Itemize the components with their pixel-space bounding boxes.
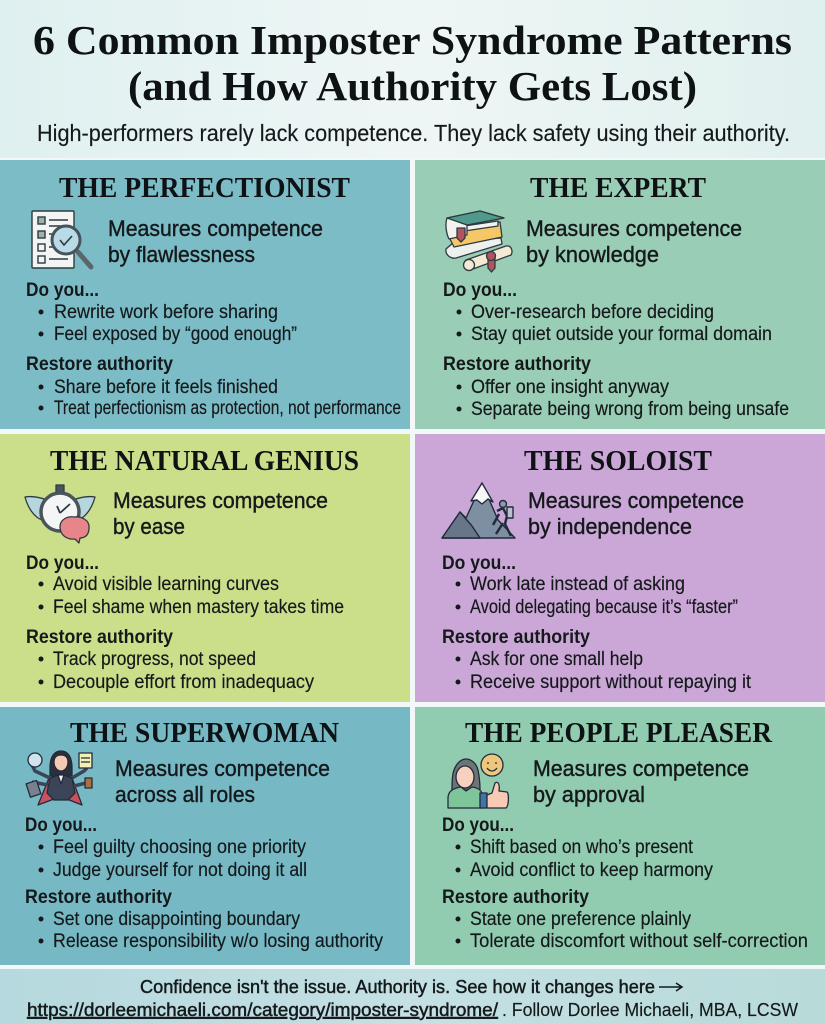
do you list: Shift based on who’s present bbox=[470, 837, 694, 858]
restore authority list: Treat perfectionism as protection, not performance bbox=[54, 398, 401, 419]
restore authority list: Tolerate discomfort without self-correction bbox=[470, 931, 808, 952]
do you list: Over-research before deciding bbox=[471, 302, 714, 323]
icon: superwoman multitasking bbox=[26, 751, 92, 805]
panel: the soloist bbox=[415, 434, 825, 702]
do you list: Feel shame when mastery takes time bbox=[53, 597, 344, 618]
heading: THE PERFECTIONIST bbox=[59, 173, 350, 204]
panel: the perfectionist bbox=[0, 160, 410, 429]
title: (and How Authority Gets Lost) bbox=[128, 63, 697, 109]
restore authority list: Restore authority bbox=[25, 886, 172, 908]
restore authority list: Separate being wrong from being unsafe bbox=[471, 399, 789, 420]
restore authority list: Receive support without repaying it bbox=[470, 672, 752, 693]
do you list bbox=[443, 279, 772, 345]
measure statement: Measures competence bbox=[533, 756, 749, 781]
icon: mountain with climber bbox=[442, 483, 515, 538]
restore authority list: Release responsibility w/o losing authority bbox=[53, 931, 383, 952]
link and follow line: https://dorleemichaeli.com/category/imposter-syndrome/ bbox=[27, 1000, 498, 1020]
measure statement: by knowledge bbox=[526, 242, 659, 267]
measure statement: Measures competence bbox=[528, 488, 744, 513]
measure statement bbox=[533, 756, 749, 807]
do you list bbox=[25, 814, 307, 881]
measure statement bbox=[108, 216, 323, 267]
restore authority list bbox=[26, 626, 314, 693]
do you list: Judge yourself for not doing it all bbox=[53, 860, 307, 881]
subtitle: High-performers rarely lack competence. They lack safety using their authority. bbox=[37, 120, 790, 146]
restore authority list: Set one disappointing boundary bbox=[53, 909, 300, 930]
restore authority list: Restore authority bbox=[442, 626, 590, 648]
do you list: Do you... bbox=[442, 552, 516, 574]
icon: checklist with magnifier bbox=[32, 211, 91, 268]
measure statement: Measures competence bbox=[108, 216, 323, 241]
restore authority list bbox=[442, 886, 808, 952]
icon: winged stopwatch and brain bbox=[25, 485, 95, 543]
restore authority list: Restore authority bbox=[442, 886, 589, 908]
restore authority list: Offer one insight anyway bbox=[471, 377, 669, 398]
do you list: Do you... bbox=[443, 279, 517, 301]
restore authority list bbox=[26, 353, 401, 419]
do you list bbox=[26, 279, 297, 345]
do you list: Rewrite work before sharing bbox=[54, 302, 278, 323]
restore authority list: Track progress, not speed bbox=[53, 649, 256, 670]
do you list bbox=[442, 552, 738, 618]
icon: books and diploma bbox=[446, 211, 512, 272]
measure statement: across all roles bbox=[115, 782, 255, 807]
title: 6 Common Imposter Syndrome Patterns bbox=[33, 17, 792, 63]
do you list: Feel exposed by “good enough” bbox=[54, 324, 297, 345]
restore authority list: Restore authority bbox=[26, 626, 173, 648]
panel: the natural genius bbox=[0, 434, 410, 702]
link and follow line: . Follow Dorlee Michaeli, MBA, LCSW bbox=[502, 1000, 798, 1020]
footer banner bbox=[0, 969, 825, 1024]
do you list bbox=[26, 552, 344, 618]
measure statement: by approval bbox=[533, 782, 645, 807]
restore authority list bbox=[442, 626, 752, 693]
measure statement: by ease bbox=[113, 514, 185, 539]
measure statement: Measures competence bbox=[115, 756, 330, 781]
heading: THE NATURAL GENIUS bbox=[50, 446, 359, 477]
do you list: Work late instead of asking bbox=[470, 574, 685, 595]
restore authority list bbox=[443, 353, 789, 420]
heading: THE EXPERT bbox=[530, 173, 706, 204]
do you list bbox=[442, 814, 713, 881]
do you list: Stay quiet outside your formal domain bbox=[471, 324, 772, 345]
call to action: Confidence isn't the issue. Authority is. See how it changes here bbox=[140, 977, 655, 997]
arrow bbox=[659, 983, 682, 991]
restore authority list: Decouple effort from inadequacy bbox=[53, 672, 314, 693]
do you list: Do you... bbox=[25, 814, 97, 836]
measure statement bbox=[526, 216, 742, 267]
heading: THE SOLOIST bbox=[524, 446, 712, 477]
do you list: Avoid conflict to keep harmony bbox=[470, 860, 713, 881]
measure statement: Measures competence bbox=[526, 216, 742, 241]
panel: the expert bbox=[415, 160, 825, 429]
do you list: Do you... bbox=[442, 814, 514, 836]
do you list: Do you... bbox=[26, 552, 99, 574]
restore authority list: State one preference plainly bbox=[470, 909, 691, 930]
panel: the superwoman bbox=[0, 707, 410, 965]
restore authority list bbox=[25, 886, 383, 952]
measure statement: by independence bbox=[528, 514, 692, 539]
restore authority list: Ask for one small help bbox=[470, 649, 643, 670]
restore authority list: Share before it feels finished bbox=[54, 377, 278, 398]
measure statement: by flawlessness bbox=[108, 242, 255, 267]
do you list: Do you... bbox=[26, 279, 99, 301]
icon: woman with thumbs up bbox=[448, 754, 508, 808]
title bbox=[33, 17, 792, 109]
panel: the people pleaser bbox=[415, 707, 825, 965]
link and follow line bbox=[27, 1000, 798, 1020]
restore authority list: Restore authority bbox=[26, 353, 173, 375]
do you list: Feel guilty choosing one priority bbox=[53, 837, 306, 858]
measure statement: Measures competence bbox=[113, 488, 328, 513]
measure statement bbox=[528, 488, 744, 539]
measure statement bbox=[113, 488, 328, 539]
measure statement bbox=[115, 756, 330, 807]
do you list: Avoid delegating because it’s “faster” bbox=[470, 597, 738, 618]
do you list: Avoid visible learning curves bbox=[53, 574, 279, 595]
heading: THE SUPERWOMAN bbox=[70, 718, 339, 749]
heading: THE PEOPLE PLEASER bbox=[465, 718, 773, 749]
restore authority list: Restore authority bbox=[443, 353, 591, 375]
